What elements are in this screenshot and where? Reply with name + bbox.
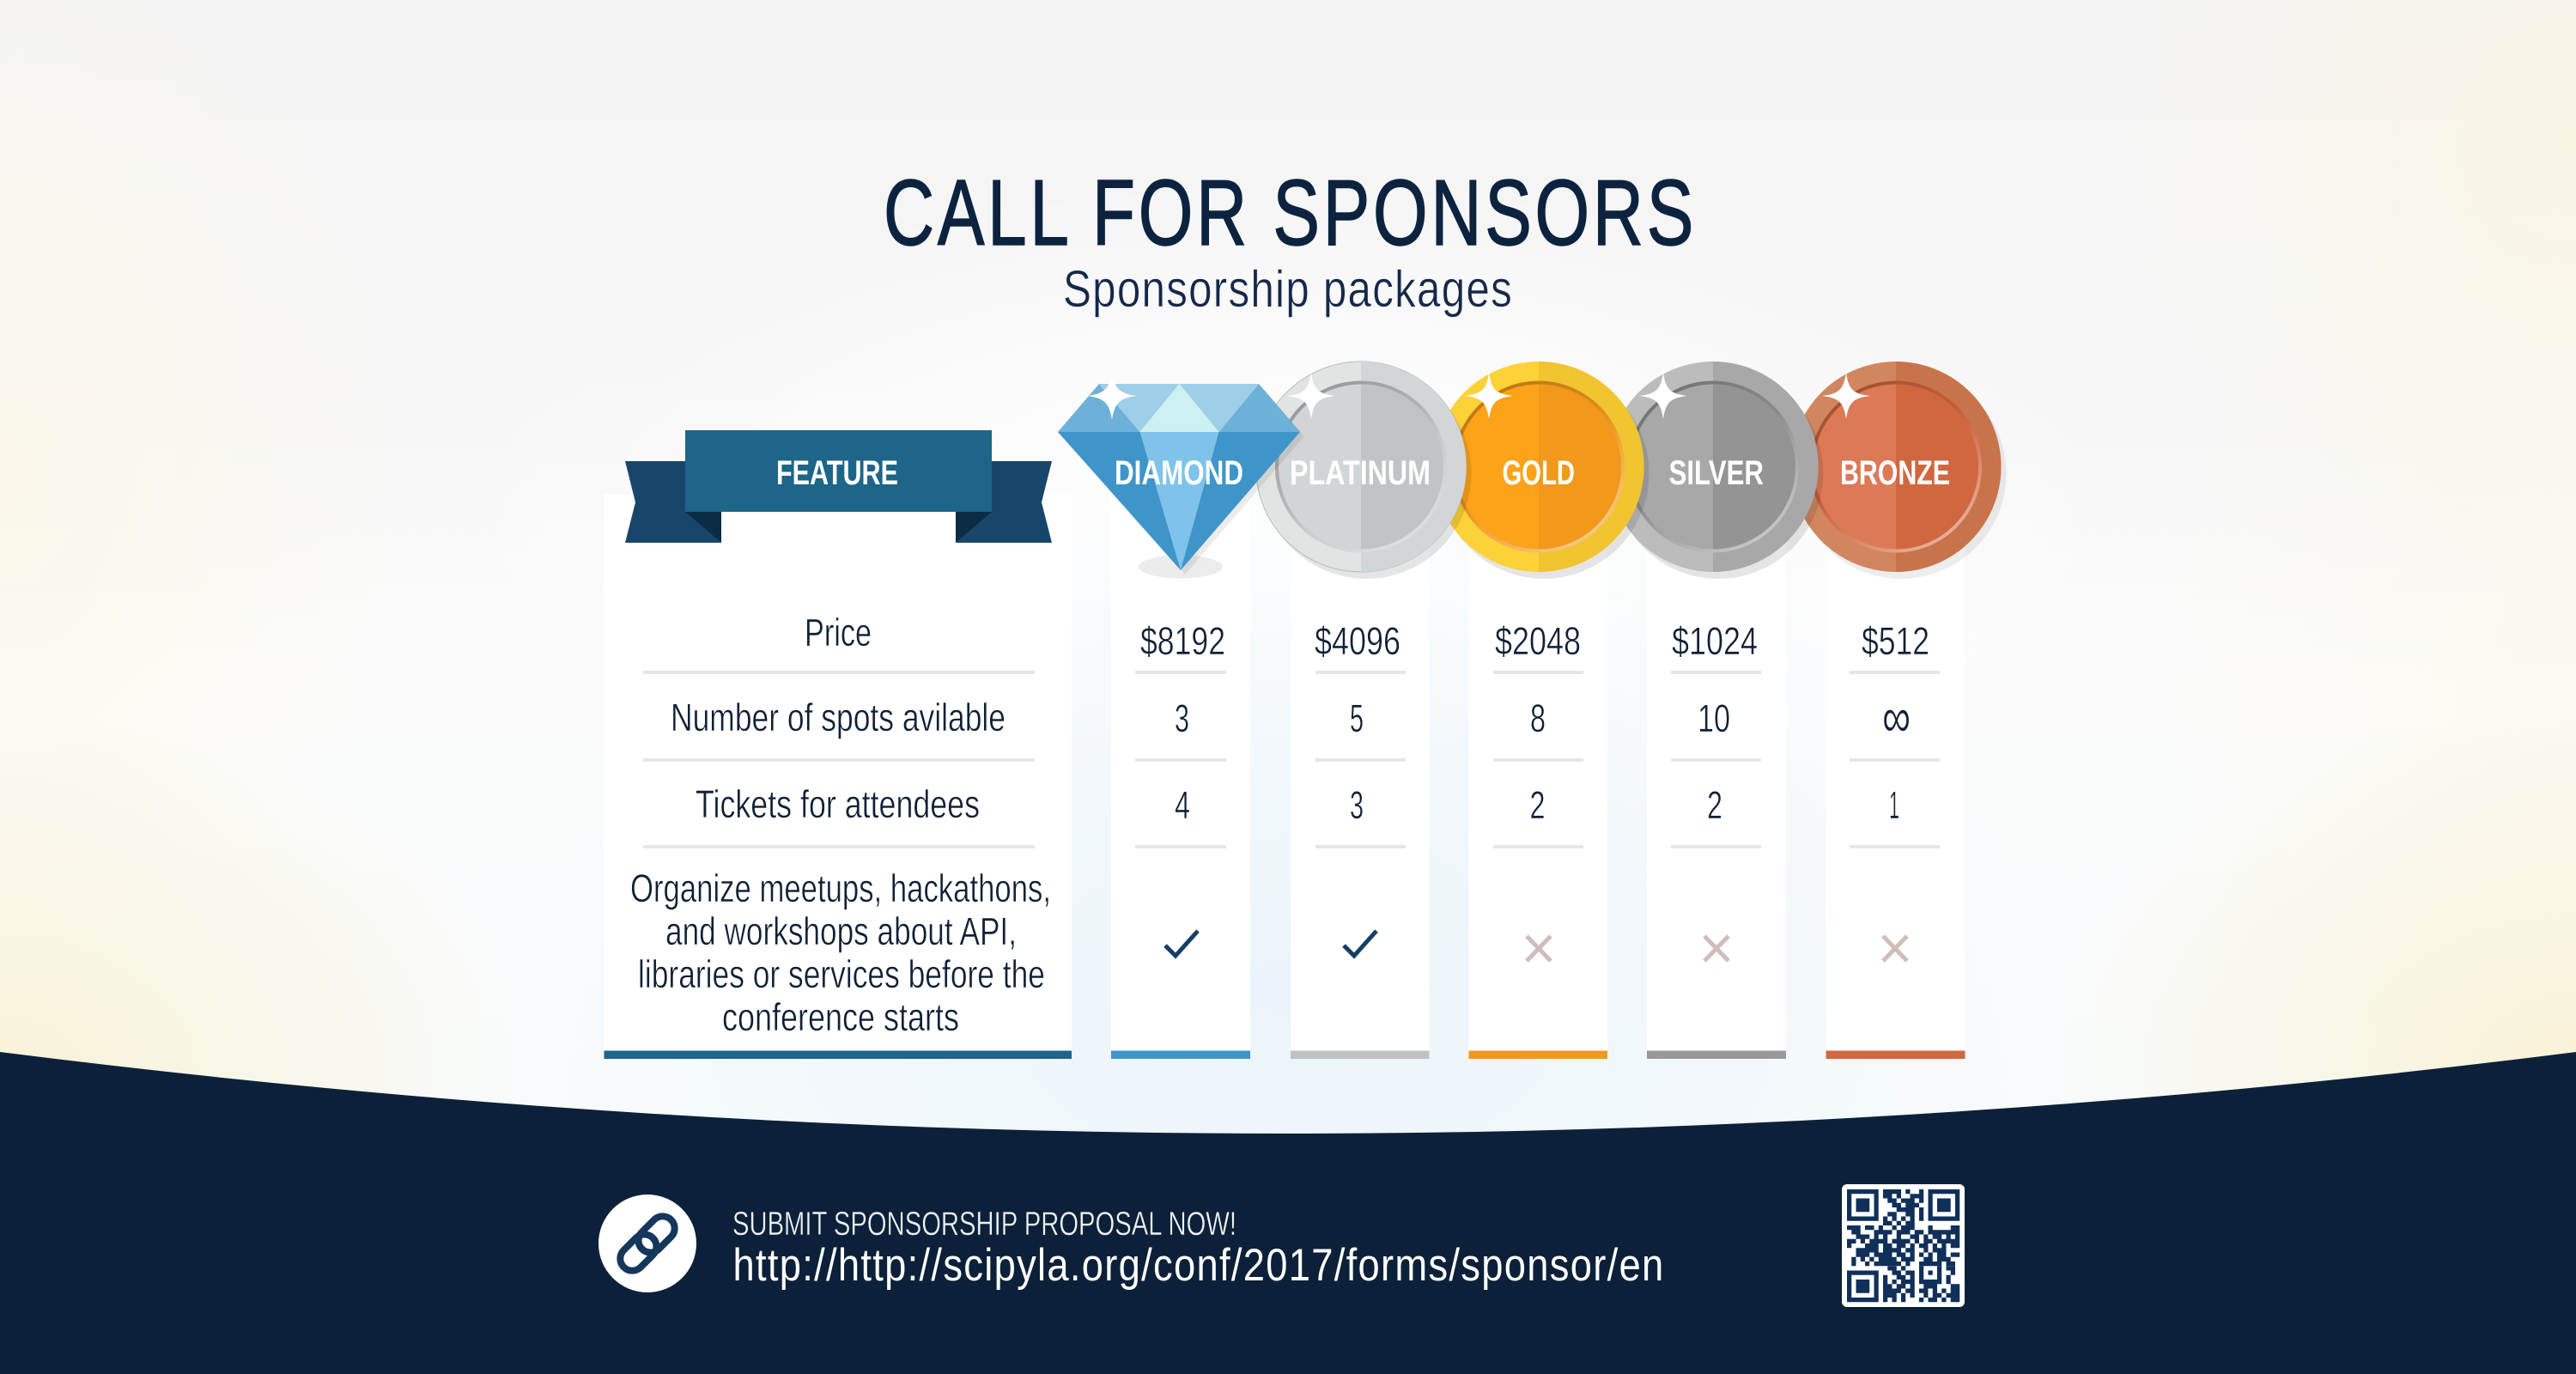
subtitle: Sponsorship packages [1063, 260, 1513, 318]
feature: organize events: and workshops about API, [665, 909, 1017, 953]
panel: platinum column: 5 [1350, 696, 1364, 740]
medal labels [1115, 454, 1950, 492]
ribbon: feature header: FEATURE [776, 454, 898, 492]
panel: silver column [1647, 495, 1786, 1059]
panel: platinum column: $4096 [1315, 619, 1400, 663]
qr code [1842, 1184, 1965, 1307]
panel: bronze column: 1 [1889, 783, 1899, 827]
medal labels: BRONZE [1840, 454, 1950, 492]
panel: gold column: $2048 [1495, 619, 1581, 663]
panel: gold column: 2 [1530, 783, 1546, 827]
medal: platinum [1255, 362, 1472, 579]
panel: silver column: 10 [1698, 696, 1730, 740]
feature: organize events: libraries or services before the [638, 952, 1045, 996]
ribbon: feature header [625, 430, 1052, 543]
feature: spots: Number of spots avilable [671, 696, 1005, 739]
medal labels: SILVER [1669, 454, 1764, 492]
medal labels: GOLD [1503, 454, 1575, 492]
title: CALL FOR SPONSORS [884, 161, 1697, 265]
call to action text: SUBMIT SPONSORSHIP PROPOSAL NOW! [732, 1206, 1236, 1243]
panel: bronze column: ∞ [1882, 685, 1911, 749]
icon: cross [1527, 936, 1551, 961]
panel: feature column [605, 495, 1072, 1059]
medal: gold [1434, 362, 1649, 579]
panel: silver column: 2 [1707, 783, 1722, 827]
panel: diamond column: 4 [1175, 783, 1190, 827]
icon: cross [1883, 936, 1907, 961]
panel: silver column: $1024 [1672, 619, 1758, 663]
medal: silver [1607, 362, 1824, 579]
medal: bronze [1791, 362, 2006, 579]
panel: diamond column [1111, 495, 1250, 1059]
feature: tickets: Tickets for attendees [696, 782, 980, 826]
panel: platinum column: 3 [1350, 783, 1364, 827]
panel: gold column [1468, 495, 1607, 1059]
icon: cross [1704, 936, 1728, 961]
icon: check [1165, 931, 1198, 956]
panel: bronze column: $512 [1862, 619, 1929, 663]
panel: bronze column [1826, 495, 1965, 1059]
feature: organize events [630, 866, 1051, 1039]
feature: organize events: Organize meetups, hackathons, [630, 866, 1051, 910]
url: http://http://scipyla.org/conf/2017/forms/sponsor/en [733, 1240, 1664, 1291]
footer band [0, 1052, 2576, 1374]
medal labels: DIAMOND [1115, 454, 1243, 492]
panel: diamond column: 3 [1175, 696, 1189, 740]
feature: organize events: conference starts [722, 995, 959, 1039]
medal labels: PLATINUM [1290, 454, 1431, 492]
medal: diamond [1058, 372, 1304, 579]
panel: gold column: 8 [1530, 696, 1546, 740]
panel: platinum column [1291, 495, 1429, 1059]
icon: check [1344, 931, 1376, 956]
feature: price: Price [805, 611, 872, 654]
panel: diamond column: $8192 [1140, 619, 1225, 663]
icon: link [598, 1195, 696, 1292]
